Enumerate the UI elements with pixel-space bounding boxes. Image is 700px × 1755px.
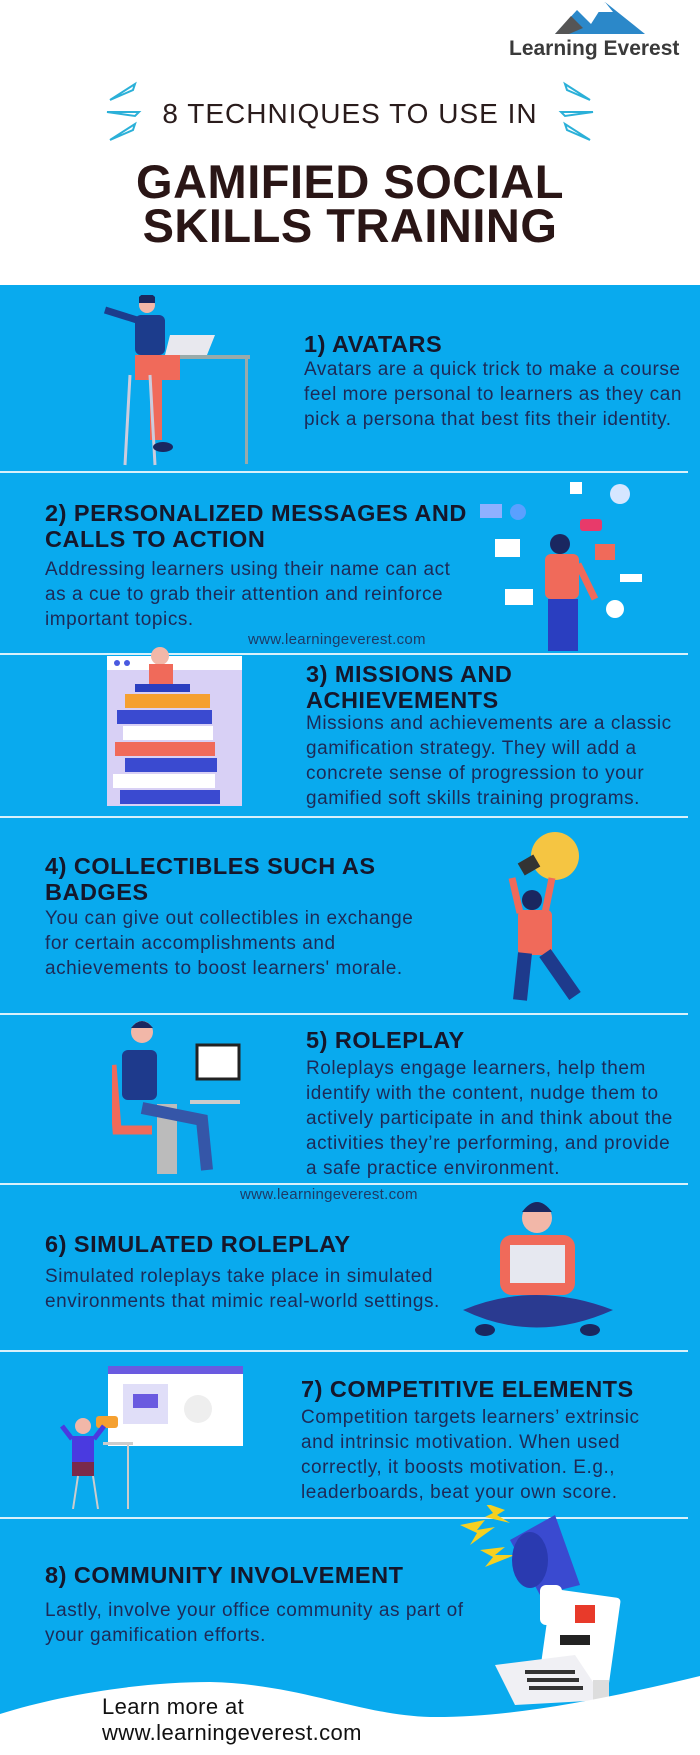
section 2 heading: 2) PERSONALIZED MESSAGES AND bbox=[45, 500, 467, 526]
section 4 heading: 4) COLLECTIBLES SUCH AS bbox=[45, 853, 376, 879]
section 5 text: activities they’re performing, and provide bbox=[306, 1133, 670, 1154]
section 5 text: actively participate in and think about the bbox=[306, 1108, 673, 1129]
logo: Learning Everest bbox=[509, 2, 680, 60]
section 1 heading: 1) AVATARS bbox=[304, 331, 442, 357]
section 5 heading: 5) ROLEPLAY bbox=[306, 1027, 465, 1053]
section 5 illustration: man at computer bbox=[112, 1021, 240, 1174]
section 2 heading bbox=[45, 500, 467, 552]
section 1 text: pick a persona that best fits their identity. bbox=[304, 409, 672, 430]
section 2 text bbox=[45, 559, 450, 630]
section 6 text: environments that mimic real-world settings. bbox=[45, 1291, 440, 1312]
section 3 text: concrete sense of progression to your bbox=[306, 763, 644, 784]
section 4 text: for certain accomplishments and bbox=[45, 933, 336, 954]
section 5 text bbox=[306, 1058, 673, 1179]
section 5 text: a safe practice environment. bbox=[306, 1158, 560, 1179]
section 4 text: achievements to boost learners' morale. bbox=[45, 958, 403, 979]
section 2 illustration: woman with icons bbox=[480, 482, 642, 651]
footer wave bbox=[0, 1676, 700, 1750]
section 3 text: gamified soft skills training programs. bbox=[306, 788, 640, 809]
footer text: Learn more at bbox=[102, 1694, 244, 1719]
watermark 2: www.learningeverest.com bbox=[240, 1186, 418, 1203]
section 7 text bbox=[301, 1407, 640, 1503]
section 3 text bbox=[306, 713, 672, 809]
section 3 heading: 3) MISSIONS AND bbox=[306, 661, 512, 687]
section 1 illustration: woman at desk bbox=[104, 295, 250, 466]
section 3 heading: ACHIEVEMENTS bbox=[306, 687, 499, 713]
section 2 text: important topics. bbox=[45, 609, 194, 630]
main title: GAMIFIED SOCIAL bbox=[136, 155, 564, 208]
decorative accents bbox=[106, 82, 594, 141]
watermark 1: www.learningeverest.com bbox=[248, 631, 426, 648]
section 3 illustration: books stack bbox=[107, 647, 242, 806]
main title: SKILLS TRAINING bbox=[143, 199, 557, 252]
section 3 text: gamification strategy. They will add a bbox=[306, 738, 637, 759]
section 5 text: Roleplays engage learners, help them bbox=[306, 1058, 646, 1079]
section 4 text bbox=[45, 908, 413, 979]
section 2 text: Addressing learners using their name can act bbox=[45, 559, 450, 580]
section 7 text: leaderboards, beat your own score. bbox=[301, 1482, 618, 1503]
section 4 heading bbox=[45, 853, 376, 905]
section 5 text: identify with the content, nudge them to bbox=[306, 1083, 659, 1104]
section 3 text: Missions and achievements are a classic bbox=[306, 713, 672, 734]
section 2 text: as a cue to grab their attention and reinforce bbox=[45, 584, 443, 605]
section 6 text bbox=[45, 1266, 440, 1312]
section 4 text: You can give out collectibles in exchange bbox=[45, 908, 413, 929]
section 1 text: Avatars are a quick trick to make a course bbox=[304, 359, 681, 380]
section 8 heading: 8) COMMUNITY INVOLVEMENT bbox=[45, 1562, 403, 1588]
section 7 text: and intrinsic motivation. When used bbox=[301, 1432, 620, 1453]
section 7 text: correctly, it boosts motivation. E.g., bbox=[301, 1457, 615, 1478]
section 8 text: Lastly, involve your office community as part of bbox=[45, 1600, 464, 1621]
section 6 illustration: man cross-legged with laptop bbox=[463, 1202, 613, 1336]
section 8 illustration: megaphone and laptop bbox=[460, 1505, 620, 1705]
section 6 heading: 6) SIMULATED ROLEPLAY bbox=[45, 1231, 351, 1257]
section 6 text: Simulated roleplays take place in simulated bbox=[45, 1266, 433, 1287]
main title bbox=[136, 155, 564, 252]
section 7 text: Competition targets learners’ extrinsic bbox=[301, 1407, 640, 1428]
section 2 heading: CALLS TO ACTION bbox=[45, 526, 265, 552]
section 8 text: your gamification efforts. bbox=[45, 1625, 266, 1646]
section 1 text bbox=[304, 359, 682, 430]
subtitle: 8 TECHNIQUES TO USE IN bbox=[162, 98, 538, 129]
logo: Learning Everest: Learning Everest bbox=[509, 37, 679, 60]
footer text: www.learningeverest.com bbox=[102, 1720, 362, 1745]
section 3 heading bbox=[306, 661, 512, 713]
section 4 illustration: man holding bulb bbox=[508, 832, 581, 1001]
section 8 text bbox=[45, 1600, 464, 1646]
footer text bbox=[102, 1694, 362, 1745]
section 1 text: feel more personal to learners as they can bbox=[304, 384, 682, 405]
section 7 heading: 7) COMPETITIVE ELEMENTS bbox=[301, 1376, 634, 1402]
section 7 illustration: woman with browser windows bbox=[60, 1366, 243, 1509]
section 4 heading: BADGES bbox=[45, 879, 149, 905]
